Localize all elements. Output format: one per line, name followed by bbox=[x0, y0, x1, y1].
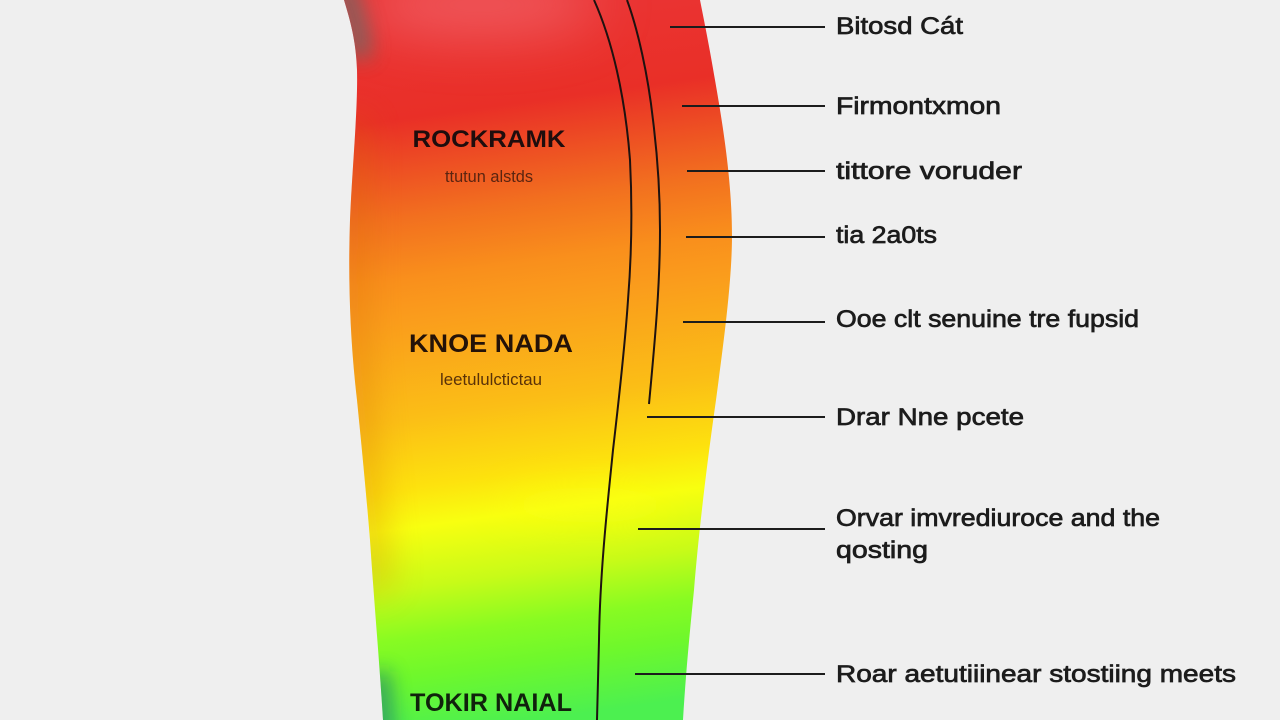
callout 7: Orvar imvrediuroce and the bbox=[836, 505, 1160, 532]
callout 7 bbox=[638, 505, 1160, 564]
callout 7: qosting bbox=[836, 537, 928, 564]
zone label: middle: KNOE NADA bbox=[409, 330, 573, 358]
inner contour line: long bbox=[594, 0, 631, 720]
callout 2: Firmontxmon bbox=[836, 93, 1001, 120]
callout 3: tittore voruder bbox=[836, 158, 1022, 185]
zone label: middle bbox=[409, 330, 573, 389]
zone label: middle: leetululctictau bbox=[440, 370, 542, 389]
callout 5: Ooe clt senuine tre fupsid bbox=[836, 306, 1139, 333]
zone label: top bbox=[412, 126, 566, 186]
callout 6: Drar Nne pcete bbox=[836, 404, 1024, 431]
callout 1: Bitosd Cát bbox=[836, 13, 963, 40]
inner contour line: short bbox=[627, 0, 660, 404]
leg shape with heat gradient bbox=[342, 0, 732, 720]
zone label: top: ttutun alstds bbox=[445, 167, 533, 186]
callout 8: Roar aetutiiinear stostiing meets bbox=[836, 661, 1236, 688]
zone label: top: ROCKRAMK bbox=[412, 126, 566, 153]
callout 4: tia 2a0ts bbox=[836, 222, 937, 249]
zone label: bottom: TOKIR NAIAL bbox=[410, 689, 572, 717]
